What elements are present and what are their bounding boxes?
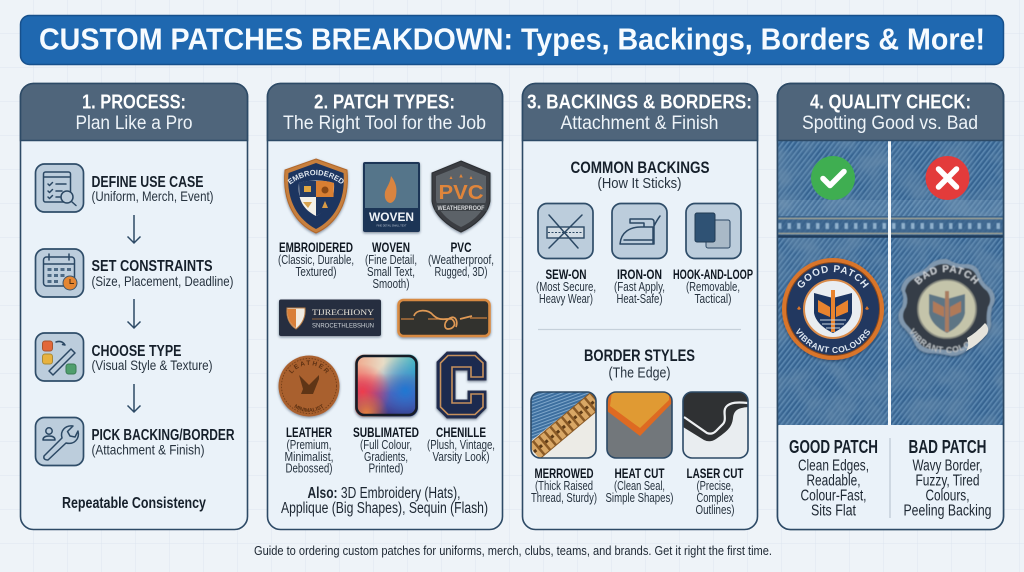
label: heat cut: (Clean Seal, (614, 478, 665, 493)
patch label: sublimated: Gradients, (364, 449, 408, 464)
patch label: pvc: Rugged, 3D) (434, 264, 488, 279)
patch: woven (363, 162, 420, 232)
patch label: chenille: CHENILLE (436, 425, 486, 440)
label: sew-on: SEW-ON (546, 267, 586, 282)
label: laser cut: LASER CUT (686, 466, 744, 481)
panel: patch types (266, 82, 504, 530)
patch strip: woven label: SNROCETHLEBSHUN (312, 324, 374, 330)
label: sew-on: Heavy Wear) (539, 291, 593, 306)
image: laser cut border (683, 392, 748, 458)
label: heat cut: HEAT CUT (614, 466, 665, 481)
label: heat cut (606, 466, 674, 505)
label: laser cut: (Precise, (696, 478, 734, 493)
step: set constraints (36, 249, 234, 297)
patch label: embroidered: (Classic, Durable, (278, 252, 354, 267)
panel header: backings and borders (522, 84, 758, 140)
title banner (20, 16, 1004, 64)
text: pick backing/border: (Attachment & Finish) (92, 442, 204, 458)
label: iron-on: IRON-ON (617, 267, 662, 282)
label: sew-on (536, 267, 596, 306)
label: iron-on: Heat-Safe) (616, 291, 662, 306)
patch: pvc: WEATHERPROOF (438, 205, 485, 212)
label: iron-on (614, 267, 665, 306)
image: heat cut border (607, 392, 672, 458)
patch label: leather (284, 425, 334, 476)
text: good patch: GOOD PATCH (789, 437, 878, 457)
text: choose type: (Visual Style & Texture) (92, 358, 212, 373)
patch label: leather: Minimalist, (284, 449, 334, 464)
step: define use case (36, 164, 214, 212)
image: merrowed border (531, 392, 597, 458)
patch strip: rope emblem (398, 300, 490, 336)
patch label: woven: Smooth) (372, 276, 410, 291)
text: bad patch (904, 437, 992, 520)
denim comparison photo (778, 140, 1003, 425)
good patch: VIBRANT COLOURS (796, 328, 870, 353)
label: merrowed: Thread, Sturdy) (531, 490, 597, 505)
panel header: process: 1. PROCESS: (82, 92, 186, 114)
patch: embroidered (282, 158, 350, 236)
heading: border styles (584, 346, 695, 382)
panel: backings and borders (522, 84, 758, 530)
label: hook-and-loop: Tactical) (694, 291, 732, 306)
text: bad patch: Colours, (926, 488, 970, 504)
text: choose type: CHOOSE TYPE (92, 343, 182, 360)
panel: process (20, 84, 248, 530)
text: also available types: Also: 3D Embroidery (Hats), (308, 485, 460, 502)
panel header: backings and borders: Attachment & Finish (560, 113, 718, 134)
patch label: woven: Small Text, (367, 264, 415, 279)
patch label: leather: (Premium, (286, 437, 332, 452)
text: bad patch: Wavy Border, (912, 458, 982, 474)
text: bad patch: Peeling Backing (904, 502, 992, 520)
patch label: pvc (428, 240, 494, 279)
icon: sew-on (538, 204, 593, 258)
patch label: woven: (Fine Detail, (365, 252, 417, 267)
patch label: leather: Debossed) (286, 460, 332, 476)
label: sew-on: (Most Secure, (536, 279, 596, 294)
text: bad patch: Fuzzy, Tired (916, 472, 980, 490)
panel header: process (20, 84, 248, 140)
patch label: embroidered: EMBROIDERED (279, 240, 353, 255)
panel header: patch types: The Right Tool for the Job (283, 113, 486, 134)
label: iron-on: (Fast Apply, (614, 279, 665, 294)
text: also available types (281, 485, 488, 517)
patch: woven: FINE DETAIL SMALL TEXT (376, 224, 407, 228)
icon: iron-on (612, 204, 667, 258)
label: hook-and-loop: (Removable, (686, 279, 740, 294)
comparison text: lower band (778, 426, 1003, 530)
patch label: embroidered: Textured) (296, 264, 336, 279)
patch: leather: LEATHER (288, 360, 329, 374)
text: repeatable consistency: Repeatable Consistency (62, 495, 206, 512)
good patch (780, 258, 886, 362)
icon: red cross (926, 156, 970, 200)
arrow (128, 215, 140, 243)
patch strip: woven label (279, 300, 381, 336)
icon: hook-and-loop (686, 204, 741, 258)
text: set constraints (92, 258, 234, 289)
patch strip: woven label: TIJRECHIONY (312, 307, 374, 317)
patch label: embroidered (278, 240, 354, 279)
text: good patch: Clean Edges, (798, 458, 869, 474)
text: set constraints: (Size, Placement, Deadline) (92, 274, 234, 289)
text: good patch: Sits Flat (811, 502, 857, 520)
arrow (128, 384, 140, 412)
patch: pvc (432, 161, 490, 232)
label: laser cut: Complex (696, 490, 734, 505)
patch label: sublimated: Printed) (368, 460, 404, 476)
patch: sublimated (355, 354, 418, 416)
text: good patch: Readable, (806, 472, 860, 490)
patch: pvc: PVC (438, 182, 484, 204)
patch label: woven: WOVEN (372, 240, 410, 255)
patch label: woven (365, 240, 417, 291)
label: hook-and-loop (673, 267, 753, 306)
patch label: pvc: PVC (450, 240, 472, 255)
bad patch (897, 258, 996, 358)
panel header: quality check: 4. QUALITY CHECK: (810, 92, 971, 114)
icon: calendar with clock (36, 249, 84, 297)
icon: checklist with magnifier (36, 164, 84, 212)
panel header: backings and borders: 3. BACKINGS & BORDERS: (527, 92, 752, 114)
bad patch: BAD PATCH (914, 264, 980, 286)
patch label: sublimated (353, 425, 419, 476)
step: choose type (36, 333, 212, 381)
bad patch: VIBRANT COLOURS (910, 328, 980, 354)
label: laser cut (686, 466, 744, 517)
patch label: chenille (427, 425, 495, 464)
panel header: patch types: 2. PATCH TYPES: (314, 92, 455, 114)
text: pick backing/border (92, 427, 235, 458)
patch: leather: MINIMALIST (294, 404, 323, 412)
heading: border styles: (The Edge) (608, 364, 670, 382)
footer caption: Guide to ordering custom patches for uniforms, merch, clubs, teams, and brands. Get it right the first time. (254, 543, 772, 558)
icon: green check (811, 156, 855, 200)
panel header: process: Plan Like a Pro (76, 113, 192, 134)
patch: leather (276, 355, 342, 420)
text: also available types: Applique (Big Shapes), Sequin (Flash) (281, 500, 488, 517)
text: define use case: (Uniform, Merch, Event) (92, 189, 214, 204)
good patch: GOOD PATCH (798, 265, 869, 288)
patch: embroidered: EMBROIDERED (288, 170, 344, 184)
step: pick backing/border (36, 418, 235, 466)
label: merrowed: (Thick Raised (535, 478, 593, 493)
patch label: chenille: Varsity Look) (432, 449, 490, 464)
heading: common backings (570, 158, 710, 192)
label: hook-and-loop: HOOK-AND-LOOP (673, 267, 753, 282)
arrow (128, 299, 140, 328)
patch: woven: WOVEN (369, 212, 414, 224)
text: good patch (789, 437, 878, 520)
text: bad patch: BAD PATCH (908, 437, 986, 457)
patch: chenille letter (437, 352, 486, 418)
text: define use case: DEFINE USE CASE (92, 174, 204, 191)
panel header: quality check (778, 84, 1004, 140)
text: good patch: Colour-Fast, (800, 488, 866, 504)
heading: common backings: COMMON BACKINGS (570, 158, 710, 177)
label: merrowed (531, 466, 597, 505)
panel header: quality check: Spotting Good vs. Bad (802, 113, 978, 134)
label: merrowed: MERROWED (534, 466, 594, 481)
panel header: patch types (268, 84, 502, 140)
heading: common backings: (How It Sticks) (598, 175, 682, 192)
panel: quality check (776, 82, 1004, 530)
patch label: chenille: (Plush, Vintage, (427, 437, 495, 452)
label: laser cut: Outlines) (696, 502, 734, 517)
text: choose type (92, 343, 212, 373)
patch label: pvc: (Weatherproof, (428, 252, 494, 267)
text: define use case (92, 174, 214, 204)
text: set constraints: SET CONSTRAINTS (92, 258, 212, 275)
heading: border styles: BORDER STYLES (584, 346, 695, 365)
patch label: leather: LEATHER (286, 425, 332, 440)
patch label: sublimated: (Full Colour, (360, 437, 412, 452)
icon: wrench and user (36, 418, 84, 466)
text: pick backing/border: PICK BACKING/BORDER (92, 427, 235, 444)
icon: swatches and pencil (36, 333, 84, 381)
label: heat cut: Simple Shapes) (606, 490, 674, 505)
patch label: sublimated: SUBLIMATED (353, 425, 419, 440)
